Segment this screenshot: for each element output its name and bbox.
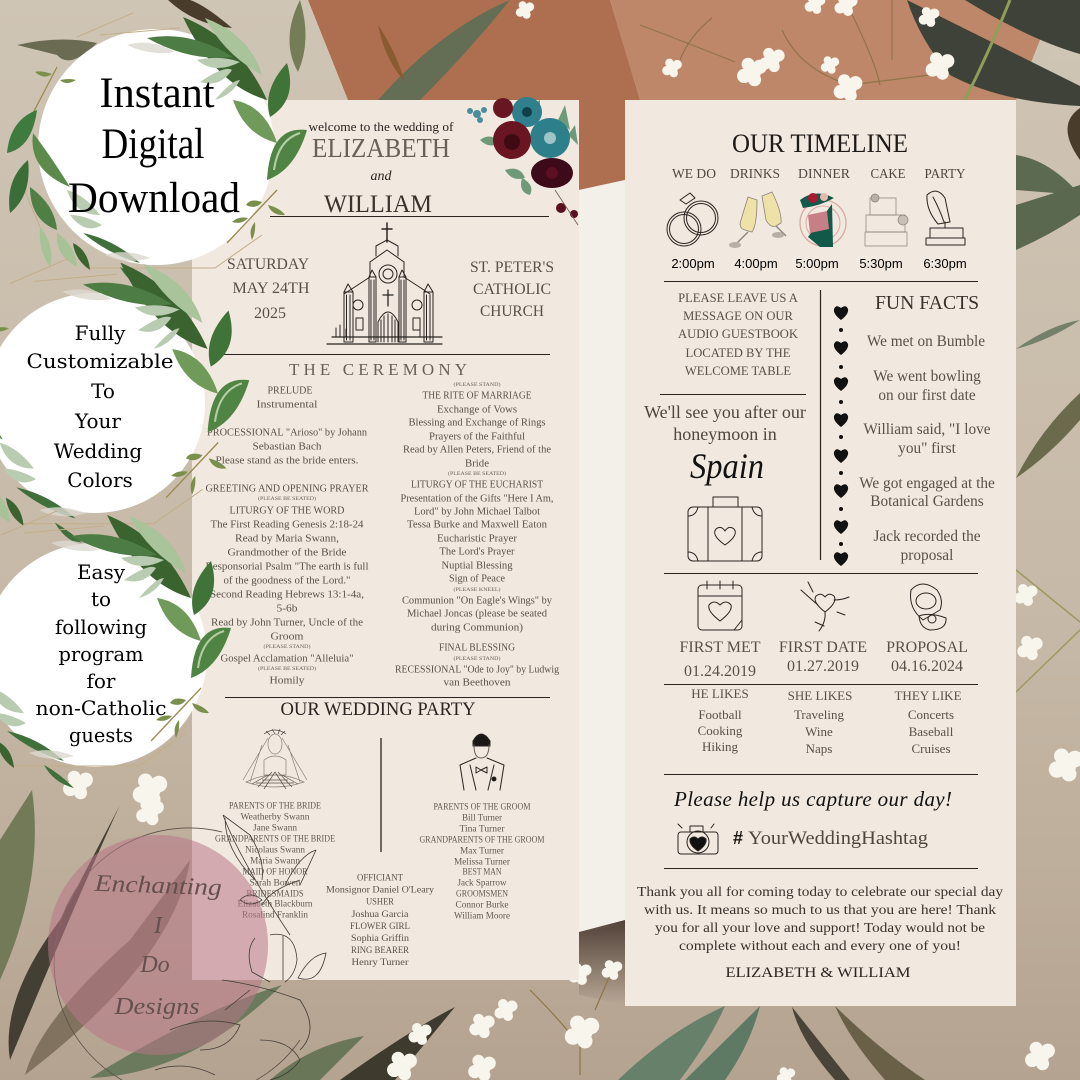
heading: the ceremony: THE CEREMONY: [289, 360, 467, 379]
text block: ceremony right column: Blessing and Exchange of Rings: [408, 418, 546, 428]
signature: couple names: ELIZABETH & WILLIAM: [726, 965, 910, 981]
timeline labels: PARTY: [924, 167, 966, 182]
text block: church name: CATHOLIC: [473, 281, 551, 298]
icon: bride with veil: [243, 729, 307, 789]
text block: fun facts: proposal: [901, 547, 953, 564]
icon: wedding cake: [865, 194, 908, 246]
text block: ceremony left column: PRELUDE: [268, 386, 312, 396]
text block: groom's party: GRANDPARENTS OF THE GROOM: [420, 836, 545, 846]
text block: officiant and attendants: Monsignor Daniel O'Leary: [326, 884, 434, 896]
text block: date: SATURDAY: [227, 256, 309, 273]
text block: groom's party: Jack Sparrow: [458, 878, 507, 888]
timeline times: 2:00pm: [671, 256, 715, 271]
text block: milestones: FIRST MET: [679, 639, 761, 656]
text block: date: MAY 24TH: [232, 280, 310, 297]
badge text: program: [58, 642, 144, 666]
text block: church name: CHURCH: [480, 303, 544, 320]
timeline times: 5:30pm: [859, 256, 903, 271]
text block: ceremony left column: (PLEASE STAND): [264, 643, 311, 650]
text block: ceremony right column: Communion "On Eagle's Wings" by: [402, 596, 553, 606]
watermark: flower sketch: [155, 815, 326, 1080]
text block: ceremony left column: LITURGY OF THE WORD: [230, 506, 345, 516]
text block: officiant and attendants: USHER: [366, 896, 394, 908]
text block: honeymoon note: [644, 402, 806, 486]
badge text: Colors: [67, 468, 133, 492]
icon: gramophone: [926, 191, 965, 245]
text block: date: [227, 256, 310, 322]
text block: ceremony right column: (PLEASE KNEEL): [454, 586, 501, 593]
text block: he likes: Cooking: [698, 723, 743, 738]
text block: audio guestbook message: LOCATED BY THE: [686, 346, 791, 360]
text block: groom's party: William Moore: [454, 912, 510, 922]
text block: ceremony right column: Lord" by John Michael Talbot: [414, 506, 540, 518]
text block: church name: ST. PETER'S: [470, 259, 554, 276]
text block: ceremony left column: PROCESSIONAL "Arioso" by Johann: [207, 428, 368, 438]
heading: welcome and names: welcome to the wedding of: [308, 120, 454, 134]
text block: ceremony left column: Homily: [270, 676, 305, 686]
wreath: [0, 511, 231, 788]
text block: honeymoon note: We'll see you after our: [644, 402, 806, 422]
wreath: [0, 259, 249, 547]
text block: he likes: [691, 686, 749, 754]
watermark text: Designs: [113, 994, 200, 1020]
text block: groom's party: Connor Burke: [456, 900, 508, 910]
text block: milestones: FIRST DATE: [779, 639, 867, 656]
badge text: Digital: [102, 121, 205, 168]
timeline times: 6:30pm: [923, 256, 967, 271]
text block: groom's party: BEST MAN: [462, 868, 502, 878]
text block: he likes: HE LIKES: [691, 686, 749, 701]
text block: groom's party: Bill Turner: [462, 814, 503, 824]
timeline times: 5:00pm: [795, 256, 839, 271]
badge text: for: [86, 669, 116, 693]
text block: bride's party: [215, 802, 335, 920]
badge text: [26, 321, 174, 492]
text block: they like: THEY LIKE: [894, 688, 962, 703]
text block: bride's party: PARENTS OF THE BRIDE: [229, 802, 321, 812]
text block: groom's party: Melissa Turner: [454, 858, 511, 868]
text block: ceremony left column: Responsorial Psalm "The earth is full: [206, 562, 369, 572]
text block: fun facts: FUN FACTS: [875, 292, 979, 314]
watermark text: Do: [139, 952, 170, 978]
text block: bride's party: Nicolaus Swann: [245, 846, 305, 856]
heading: welcome and names: [308, 120, 454, 218]
icon: calendar with heart: [698, 581, 742, 630]
text block: honeymoon note: Spain: [690, 446, 764, 486]
text block: he likes: Hiking: [702, 739, 739, 754]
text block: groom's party: GROOMSMEN: [456, 890, 508, 900]
text block: groom's party: [420, 802, 545, 922]
badge: fully customizable: [0, 259, 249, 547]
wreath: [7, 13, 307, 290]
text block: ceremony left column: Sebastian Bach: [252, 442, 322, 452]
badge text: guests: [69, 723, 133, 747]
text block: ceremony left column: (PLEASE BE SEATED): [258, 665, 316, 672]
icon: church: [327, 223, 442, 344]
text block: bride's party: GRANDPARENTS OF THE BRIDE: [215, 834, 335, 844]
text block: groom's party: Max Turner: [460, 846, 505, 856]
text block: ceremony left column: Instrumental: [256, 400, 318, 410]
text block: milestones: 04.16.2024: [891, 658, 963, 675]
text block: milestones: [679, 639, 968, 680]
text block: officiant and attendants: [326, 872, 434, 968]
text block: bride's party: MAID OF HONOR: [242, 868, 308, 878]
timeline times: [671, 256, 967, 271]
text block: thank you note: you for all your love and support! Today would not be: [655, 921, 985, 936]
text block: bride's party: Weatherby Swann: [240, 812, 310, 822]
text block: fun facts: [859, 292, 995, 564]
text block: ceremony right column: Bride: [465, 458, 489, 470]
badge text: Your: [74, 409, 121, 433]
heading: our wedding party: OUR WEDDING PARTY: [280, 700, 476, 720]
watermark: enchanting i do designs: [48, 815, 326, 1080]
panel: reception timeline (right card): [625, 100, 1016, 1006]
text block: ceremony right column: Tessa Burke and Maxwell Eaton: [407, 520, 548, 530]
text block: thank you note: with us. It means so much to us that you are here! Thank: [644, 903, 996, 918]
text block: ceremony right column: during Communion): [431, 622, 523, 634]
text block: bride's party: Rosalind Franklin: [242, 910, 308, 920]
text block: ceremony left column: Please stand as the bride enters.: [216, 456, 358, 466]
text block: ceremony left column: 5-6b: [276, 604, 298, 614]
text block: bride's party: Maria Swann: [250, 856, 300, 866]
text block: ceremony right column: (PLEASE BE SEATED): [448, 470, 506, 477]
script: capture our day: Please help us capture our day!: [673, 787, 952, 811]
text block: officiant and attendants: RING BEARER: [351, 945, 409, 956]
text block: fun facts: Jack recorded the: [873, 528, 981, 545]
heading: welcome and names: WILLIAM: [324, 191, 432, 218]
text block: ceremony left column: Read by John Turner, Uncle of the: [211, 618, 363, 628]
timeline times: 4:00pm: [734, 256, 778, 271]
text block: audio guestbook message: PLEASE LEAVE US A: [678, 291, 798, 305]
badge text: To: [91, 379, 115, 403]
timeline labels: DRINKS: [730, 167, 780, 182]
text block: ceremony left column: (PLEASE BE SEATED): [258, 495, 316, 502]
icon: suitcase: [688, 497, 762, 561]
text block: honeymoon note: honeymoon in: [673, 424, 777, 444]
text block: audio guestbook message: AUDIO GUESTBOOK: [678, 327, 798, 341]
text block: bride's party: Elizabeth Blackburn: [238, 900, 313, 910]
watermark text: Enchanting: [93, 871, 222, 901]
text block: ceremony right column: RECESSIONAL "Ode to Joy" by Ludwig: [395, 664, 560, 676]
flower stems: [530, 0, 1080, 1075]
text block: fun facts: We met on Bumble: [867, 333, 985, 350]
text block: officiant and attendants: OFFICIANT: [357, 872, 403, 884]
text block: fun facts: you" first: [898, 440, 957, 457]
text block: church name: [470, 259, 554, 320]
text block: they like: Baseball: [909, 724, 954, 739]
text block: she likes: [788, 688, 852, 756]
text block: she likes: SHE LIKES: [788, 688, 852, 703]
text block: thank you note: complete without each and every one of you!: [679, 939, 961, 954]
badge text: [68, 70, 240, 222]
floral corner bouquet: [467, 97, 578, 225]
badge text: to: [91, 587, 111, 611]
icon: champagne flutes: [729, 192, 786, 248]
panel: wedding program (left card): [192, 97, 579, 980]
text block: ceremony left column: Gospel Acclamation "Alleluia": [220, 654, 354, 664]
text block: she likes: Traveling: [794, 707, 845, 722]
heading: welcome and names: and: [370, 169, 392, 184]
text block: officiant and attendants: Henry Turner: [352, 957, 409, 968]
text: hashtag: #: [733, 828, 743, 848]
text block: ceremony right column: Sign of Peace: [449, 574, 505, 584]
text block: she likes: Naps: [806, 741, 832, 756]
heading: our timeline: OUR TIMELINE: [732, 129, 908, 158]
text block: ceremony right column: Exchange of Vows: [437, 404, 517, 416]
timeline labels: [672, 167, 966, 182]
badge: easy to follow: [0, 511, 231, 788]
badge text: Customizable: [26, 349, 174, 373]
icon: camera with heart: [678, 824, 718, 854]
badge text: Instant: [100, 70, 215, 117]
eucalyptus leaves: top and right: [17, 0, 1080, 478]
badge: instant digital download: [7, 13, 307, 290]
badge text: following: [55, 615, 147, 639]
text: hashtag: YourWeddingHashtag: [748, 828, 929, 849]
text block: ceremony right column: The Lord's Prayer: [440, 546, 515, 558]
text block: they like: Concerts: [908, 707, 954, 722]
timeline labels: DINNER: [798, 167, 851, 182]
text block: fun facts: We got engaged at the: [859, 475, 995, 492]
text block: officiant and attendants: Sophia Griffin: [351, 933, 409, 944]
text block: ceremony right column: THE RITE OF MARRIAGE: [422, 390, 532, 402]
text block: he likes: Football: [698, 707, 742, 722]
text block: ceremony right column: Nuptial Blessing: [442, 560, 513, 572]
icon: heart with vine: [801, 582, 849, 631]
text block: they like: [894, 688, 962, 756]
watermark text: [93, 871, 222, 1020]
badge text: non-Catholic: [36, 696, 166, 720]
text block: ceremony right column: Read by Allen Peters, Friend of the: [403, 444, 551, 456]
badge text: Wedding: [54, 439, 142, 463]
text block: ceremony left column: Groom: [270, 632, 304, 642]
text block: milestones: 01.24.2019: [684, 663, 756, 680]
text block: fun facts: William said, "I love: [863, 421, 991, 438]
icon: dinner plate with menu: [800, 193, 846, 247]
text block: ceremony right column: van Beethoven: [444, 678, 511, 688]
badge text: Easy: [77, 560, 126, 584]
text block: ceremony left column: Second Reading Hebrews 13:1-4a,: [210, 590, 364, 600]
text block: ceremony right column: LITURGY OF THE EUCHARIST: [411, 480, 543, 490]
text block: groom's party: Tina Turner: [460, 824, 505, 834]
text block: bride's party: Sarah Bowen: [250, 878, 301, 888]
text block: ceremony right column: (PLEASE STAND): [454, 655, 501, 662]
divider: bride and groom: [380, 738, 382, 852]
text block: ceremony right column: Prayers of the Faithful: [429, 432, 525, 442]
text block: audio guestbook message: WELCOME TABLE: [685, 364, 791, 378]
text block: ceremony left column: of the goodness of the Lord.": [224, 576, 350, 586]
hearts column: [834, 306, 848, 566]
text block: ceremony left column: [206, 386, 369, 686]
text block: fun facts: Botanical Gardens: [870, 493, 984, 510]
timeline labels: WE DO: [672, 167, 716, 182]
text block: groom's party: PARENTS OF THE GROOM: [434, 802, 531, 812]
text block: ceremony left column: GREETING AND OPENING PRAYER: [206, 484, 369, 494]
text block: ceremony right column: Presentation of the Gifts "Here I Am,: [400, 494, 554, 504]
badge text: Fully: [75, 321, 126, 345]
text block: fun facts: We went bowling: [873, 368, 981, 385]
text block: thank you note: Thank you all for coming today to celebrate our special day: [637, 885, 1003, 900]
text block: thank you note: [637, 885, 1003, 954]
text block: officiant and attendants: Joshua Garcia: [352, 909, 409, 920]
text block: date: 2025: [254, 305, 286, 322]
text block: ceremony left column: Grandmother of the Bride: [228, 548, 347, 558]
text block: bride's party: Jane Swann: [253, 824, 297, 834]
text block: audio guestbook message: MESSAGE ON OUR: [683, 309, 794, 323]
timeline labels: CAKE: [870, 167, 906, 182]
text block: ceremony right column: Eucharistic Prayer: [437, 534, 517, 544]
badge text: [36, 560, 166, 747]
text block: ceremony left column: Read by Maria Swann,: [235, 534, 339, 544]
text block: officiant and attendants: FLOWER GIRL: [350, 921, 410, 932]
text block: she likes: Wine: [805, 724, 833, 739]
text block: ceremony right column: [395, 381, 560, 688]
icon: wedding rings: [667, 193, 718, 246]
icon: ring box: [910, 584, 946, 630]
icon: groom in suit: [460, 734, 504, 790]
text block: milestones: PROPOSAL: [886, 639, 968, 656]
text block: ceremony right column: (PLEASE STAND): [454, 381, 501, 388]
text block: ceremony left column: The First Reading Genesis 2:18-24: [210, 520, 364, 530]
text block: audio guestbook message: [678, 291, 798, 378]
eucalyptus leaves: bottom: [0, 790, 925, 1080]
text block: bride's party: BRIDESMAIDS: [246, 890, 304, 900]
text block: milestones: 01.27.2019: [787, 658, 859, 675]
text block: fun facts: on our first date: [878, 387, 976, 404]
badge text: Download: [68, 175, 240, 222]
text block: ceremony right column: FINAL BLESSING: [439, 642, 515, 654]
heading: welcome and names: ELIZABETH: [312, 133, 450, 163]
text block: they like: Cruises: [912, 741, 950, 756]
watermark text: I: [153, 913, 163, 939]
text block: ceremony right column: Michael Joncas (please be seated: [407, 608, 548, 620]
